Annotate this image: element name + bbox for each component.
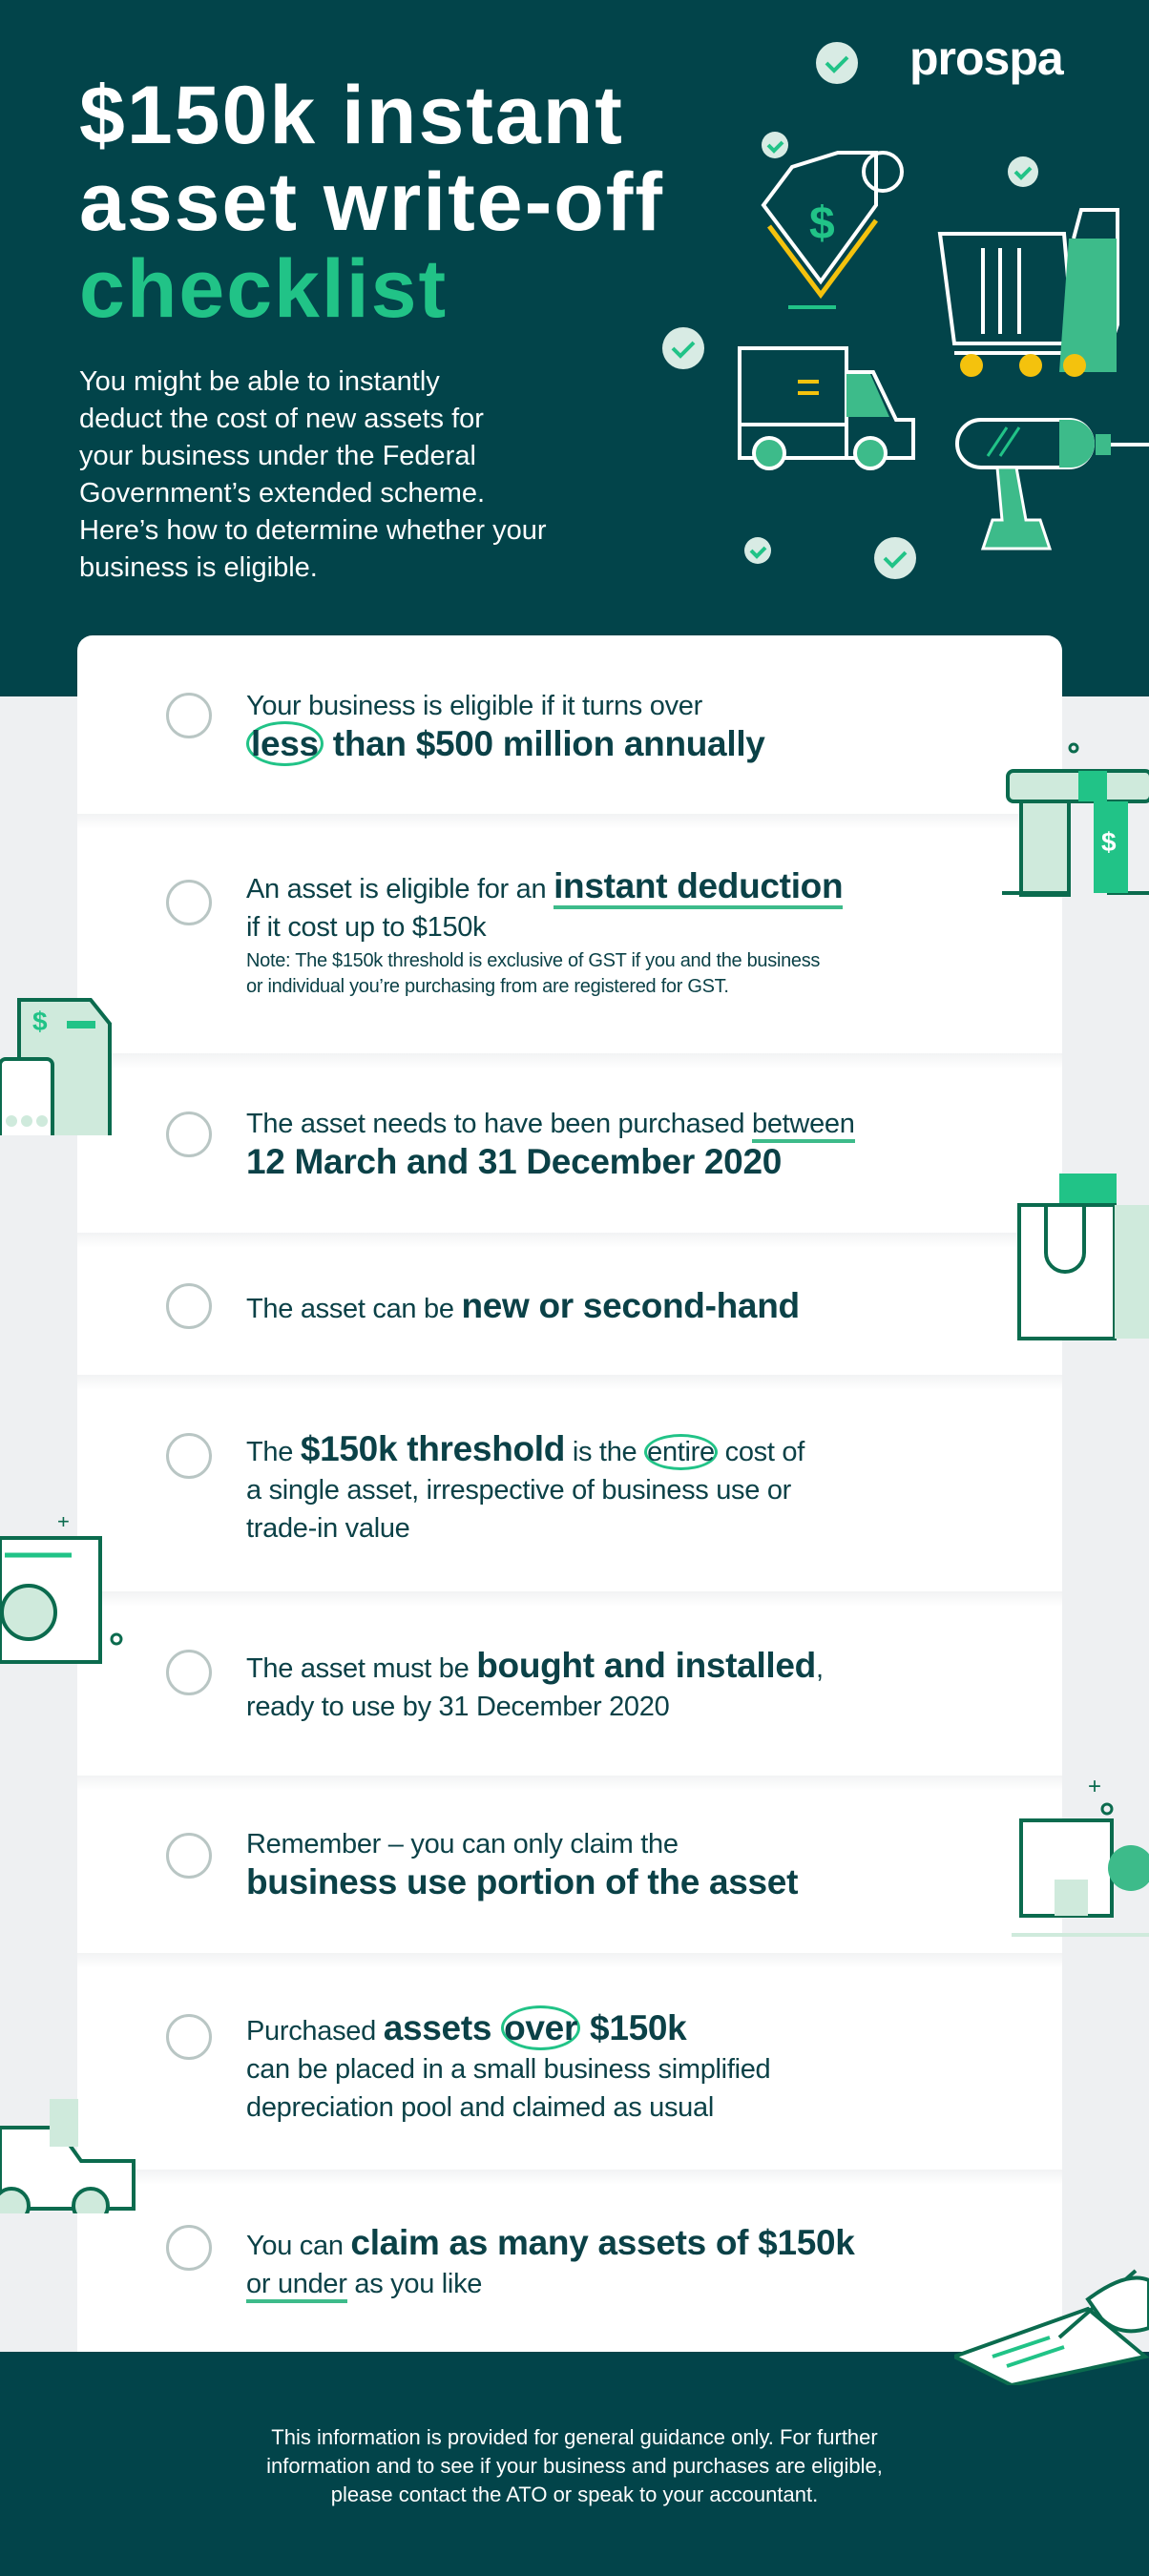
item 5: a single asset, irrespective of business use or [246,1475,791,1506]
item 1: Your business is eligible if it turns over [246,691,702,721]
icon: calculator and document [0,998,112,1135]
item 6 [246,1646,824,1722]
item 9: or under as you like [246,2269,482,2299]
item 4: The asset can be new or second-hand [246,1286,800,1325]
item 6: ready to use by 31 December 2020 [246,1692,669,1722]
icon: shopping bag [1017,1174,1149,1340]
item 2: An asset is eligible for an instant deduction [246,866,843,905]
icon: shop front [1012,1775,1149,1937]
intro text: Here’s how to determine whether your [79,515,546,546]
item 2: if it cost up to $150k [246,912,486,943]
intro text [79,366,546,583]
item 9: You can claim as many assets of $150k [246,2223,855,2262]
item 8: Purchased assets over $150k [246,2008,686,2047]
header illustrations [662,42,1149,579]
item 1 [246,691,765,766]
van [740,348,913,458]
title [79,70,664,335]
header background [0,0,1149,696]
item 1: less than $500 million annually [251,724,765,763]
price tag [763,153,902,281]
checkbox circles [166,693,212,2271]
footer disclaimer: This information is provided for general guidance only. For further [271,2425,878,2449]
card: checklist [77,635,1062,2352]
item 9 [246,2223,855,2303]
item 5 [246,1429,805,1544]
intro text: Government’s extended scheme. [79,478,485,509]
item 5: trade-in value [246,1513,410,1544]
footer background [0,2352,1149,2576]
intro text: deduct the cost of new assets for [79,404,484,434]
item 6: The asset must be bought and installed, [246,1646,824,1685]
icon: money stack: $ [1101,827,1117,857]
header illustrations: $ [809,198,835,249]
intro text: business is eligible. [79,552,318,583]
item 7: business use portion of the asset [246,1862,798,1901]
item 8: can be placed in a small business simplified [246,2054,770,2085]
item 2: Note: The $150k threshold is exclusive of GST if you and the business [246,950,820,971]
cart [940,210,1118,353]
item 8: depreciation pool and claimed as usual [246,2092,714,2123]
icon: money stack [1002,742,1149,897]
title: $150k instant [79,70,624,161]
item 8 [246,2005,770,2123]
title: asset write-off [79,156,664,248]
icon: calculator and document: $ [32,1007,48,1036]
item 2 [246,866,843,997]
item 3: 12 March and 31 December 2020 [246,1142,782,1181]
intro text: You might be able to instantly [79,366,440,397]
icon: hand signing [954,2269,1149,2385]
item 5: The $150k threshold is the entire cost of [246,1429,804,1468]
item 2: or individual you’re purchasing from are registered for GST. [246,976,729,997]
icon: car [0,2099,136,2213]
footer disclaimer: please contact the ATO or speak to your accountant. [331,2483,818,2506]
logo: prospa: prospa [909,31,1063,85]
drill [957,420,1149,467]
footer disclaimer: information and to see if your business and purchases are eligible, [266,2454,883,2478]
intro text: your business under the Federal [79,441,476,471]
title: checklist [79,243,448,335]
item 3 [246,1109,855,1181]
item 7 [246,1829,798,1901]
icon: washing machine [0,1517,122,1664]
item 7: Remember – you can only claim the [246,1829,679,1859]
item 3: The asset needs to have been purchased between [246,1109,855,1139]
footer disclaimer [266,2425,883,2506]
